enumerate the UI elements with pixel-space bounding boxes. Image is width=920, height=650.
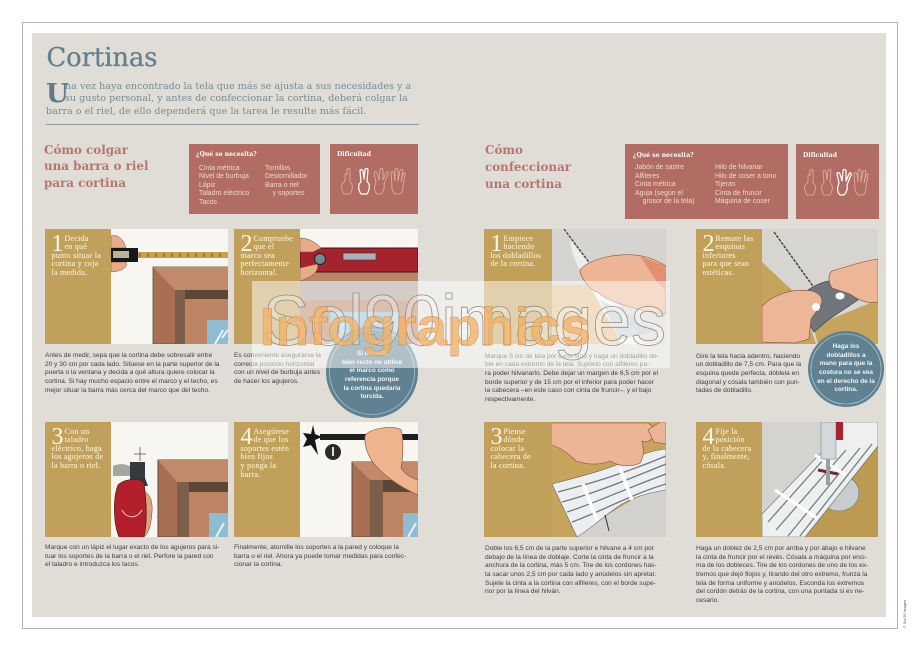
text: step 4: cionar la cortina. (234, 561, 282, 568)
callout: marco torcido: el marco como (349, 367, 395, 374)
watermark band (252, 281, 670, 368)
text: step 4: cesario. (696, 597, 719, 604)
intro paragraph: su gusto personal, y antes de confeccionar la cortina, deberá colgar la (65, 93, 408, 104)
step 2 caption: horizontal. (240, 268, 278, 277)
step 4 caption: 4 (240, 424, 252, 450)
text: step 4 (234, 544, 406, 568)
text: step 3: ta sacar unos 2,5 cm por cada lado y anúdelos sin apretar. (485, 571, 656, 578)
text: step 2: Es conveniente asegurarse la (234, 352, 321, 359)
step 3 caption: los agujeros de (52, 452, 103, 461)
panel: que se necesita right: Hilo de coser a tono (715, 172, 776, 180)
callout: dobladillos a mano: cortina. (834, 386, 858, 393)
step 3 caption: Piense (504, 426, 526, 436)
callout: dobladillos a mano: dobladillos a (826, 352, 866, 359)
step 1 caption: 1 (490, 230, 502, 256)
step 1 caption: Empiece (504, 234, 533, 242)
text: step 1 (485, 352, 659, 403)
panel: que se necesita right: Aguja (según el (635, 190, 683, 196)
text: step 1: Antes de medir, sepa que la cortina debe sobresalir entre (45, 352, 212, 359)
text: step 4: barra o el riel. Ahora ya puede tomar medidas para confec- (234, 553, 406, 560)
panel: confeccionar step 2 (696, 229, 878, 344)
watermark text: Infographics (260, 298, 591, 357)
intro paragraph: barra o el riel, de ello dependerá que la tarea le resulte más fácil. (46, 106, 366, 117)
step 2 caption: 2 (240, 230, 252, 256)
panel: colgar step 4 (234, 422, 418, 537)
panel: que se necesita left: Nivel de burbuja (199, 173, 249, 180)
panel: dificultad right: Dificultad (803, 152, 837, 159)
text: step 2 (234, 352, 321, 385)
callout: marco torcido: la cortina quedaría (344, 385, 400, 392)
step 1 caption: haciendo (504, 242, 534, 251)
step 4 caption: cósala. (702, 461, 726, 470)
step 4 caption: bien fijos (240, 452, 273, 461)
step 4 caption: 4 (702, 424, 714, 450)
step 2 caption: perfectamente (240, 259, 289, 268)
step 1 caption: de la cortina. (490, 259, 536, 268)
callout: dobladillos a mano: costura no se vea (819, 369, 873, 376)
panel: que se necesita right: ¿Qué se necesita? (633, 152, 694, 159)
step 2 caption: estéticas. (702, 268, 734, 277)
copyright credit: © Sol 90 Images (903, 600, 907, 628)
step 1 caption (45, 229, 111, 344)
callout: marco torcido: torcida. (360, 393, 384, 400)
step 1 caption: 1 (52, 230, 64, 256)
step 2 caption: que el (254, 242, 274, 251)
callout: dobladillos a mano: mano para que la (820, 360, 872, 367)
text: step 4: Finalmente, atornille los soportes a la pared y coloque la (234, 544, 399, 551)
text: step 3 (485, 545, 657, 595)
text: step 3: Doble los 6,5 cm de la parte superior e hilvane a 4 cm por (485, 545, 654, 552)
callout: marco torcido: Si no está (357, 350, 387, 357)
step 2 caption: 2 (702, 230, 714, 256)
panel: confeccionar step 3 (484, 422, 666, 537)
step 4 caption (234, 422, 300, 537)
panel: colgar step 2 (234, 229, 418, 344)
step 3 caption: cabecera de (490, 452, 531, 461)
text: step 4 (696, 545, 868, 604)
step 3 caption: Con un (64, 426, 89, 436)
step 1 caption: en qué (64, 242, 87, 251)
text: step 3: rior por la línea del hilván. (485, 588, 561, 595)
step 3 caption: taladro (64, 435, 88, 444)
text: step 1: ra poder hilvanarlo. Debe dejar un margen de 6,5 cm por el (485, 370, 658, 377)
step 1 caption: los dobladillos (490, 251, 541, 260)
panel: colgar step 1 (45, 229, 228, 344)
callout: dobladillos a mano (808, 331, 884, 407)
step 4 caption: de la cabecera (702, 444, 751, 453)
watermark text: Sol90images (263, 282, 666, 361)
panel: que se necesita right: Jabón de sastre (635, 164, 684, 171)
text: step 2: Gire la tela hacia adentro, haciendo (696, 352, 800, 360)
text: step 1 (45, 352, 220, 394)
text: step 4: ma de los dobleces. Tire de los cordones de uno de los ex- (696, 562, 868, 569)
step 1 caption: cortina y coja (52, 259, 99, 268)
step 3 caption (484, 422, 552, 537)
panel: que se necesita left: ¿Qué se necesita? (196, 151, 257, 158)
panel: que se necesita right: Tijeras (715, 181, 735, 188)
panel: dificultad left: Dificultad (337, 151, 371, 158)
step 4 caption: y, finalmente, (702, 452, 750, 461)
panel: confeccionar step 4 (696, 422, 878, 537)
step 2 caption: Compruebe (254, 234, 293, 242)
heading: como confeccionar: una cortina (485, 177, 562, 191)
text: step 1: 20 y 30 cm por cada lado. Sitúese en la parte superior de la (45, 361, 219, 368)
panel: que se necesita right: Máquina de coser (715, 198, 770, 205)
text: step 4: tremos que dejó flojos y, tirando del otro extremo, frunza la (696, 571, 867, 578)
step 2 caption (234, 229, 300, 344)
title: Cortinas (46, 43, 157, 73)
panel: que se necesita right: Alfileres (635, 172, 660, 180)
text: step 1: la cabecera –en este caso con cinta de fruncir–, y el bajo (485, 387, 651, 394)
text: step 3: Sujete la cinta a la cortina con alfileres, con el borde supe- (485, 580, 656, 587)
step 1 caption: la medida. (52, 268, 87, 277)
panel: que se necesita left: Cinta métrica (199, 164, 240, 172)
step 2 caption (696, 229, 762, 344)
text: step 1: puerta o la ventana y decida a qué altura quiere colocar la (45, 369, 215, 376)
heading: como colgar: Cómo colgar (44, 143, 128, 157)
text: step 3 (45, 544, 220, 568)
panel: colgar step 3 (45, 422, 228, 537)
text: step 4: Haga un doblez de 2,5 cm por arriba y por abajo e hilvane (696, 545, 866, 552)
step 4 caption: soportes estén (240, 444, 289, 453)
panel: que se necesita right: Cinta métrica (635, 181, 676, 188)
panel: que se necesita left: Tacos (199, 198, 217, 206)
icon: difficulty hands, level 2 (341, 168, 406, 195)
callout: dobladillos a mano: Haga los (833, 343, 859, 350)
text: step 3: el taladro e introduzca los tacos. (45, 561, 140, 568)
text: step 1: mejor situar la barra más cerca del marco que del techo. (45, 387, 210, 394)
heading: como colgar (44, 143, 148, 190)
step 1 caption (484, 229, 552, 344)
panel: que se necesita right (625, 144, 788, 219)
step 4 caption: posición (716, 435, 745, 444)
step 3 caption (45, 422, 111, 537)
heading: como confeccionar: Cómo (485, 143, 523, 157)
panel: que se necesita right: grosor de la tela) (643, 198, 694, 205)
icon: difficulty hands, level 3 (804, 168, 869, 196)
step 3 caption: dónde (504, 435, 524, 444)
step 3 caption: la barra o riel. (52, 461, 100, 470)
panel: que se necesita right: Cinta de fruncir (715, 190, 762, 196)
step 4 caption: Asegúrese (254, 426, 289, 436)
text: step 4: del cordón detrás de la cortina, con una puntada si es ne- (696, 588, 864, 595)
panel: que se necesita left: y soportes (273, 190, 304, 197)
callout: dobladillos a mano: en el derecho de la (817, 378, 875, 385)
heading: como confeccionar: confeccionar (485, 160, 571, 174)
text: step 1: respectivamente. (485, 396, 535, 403)
panel: que se necesita left: Barra o riel (265, 182, 299, 188)
heading: como colgar: una barra o riel (44, 159, 148, 173)
step 3 caption: eléctrico, haga (52, 444, 102, 453)
panel: que se necesita right: Hilo de hilvanar (715, 164, 762, 171)
step 4 caption: y ponga la (240, 461, 276, 470)
heading: como colgar: para cortina (44, 176, 126, 190)
step 4 caption: Fije la (716, 426, 737, 436)
text: step 2: de hacer los agujeros. (234, 378, 299, 385)
text: step 1: ble en cada extremo de la tela. Sujételo con alfileres pa- (485, 361, 649, 368)
text: step 2: esquina quede perfecta, dóblela en (696, 370, 799, 377)
text: step 1: cortina. Si hay mucho espacio entre el marco y el techo, es (45, 378, 218, 385)
step 2 caption: inferiores (702, 251, 736, 260)
intro paragraph (46, 78, 411, 117)
text: step 3: tuar los soportes de la barra o el riel. Perfore la pared con (45, 553, 214, 560)
step 2 caption: marco sea (240, 251, 275, 260)
text: step 3: anchura de la cortina, más 5 cm. Tire de los cordones has- (485, 562, 657, 569)
step 1 caption: Decida (64, 234, 89, 242)
callout: marco torcido: referencia porque (345, 376, 399, 383)
text: step 1: Marque 5 cm de tela por cada lado y haga un dobladillo do- (485, 352, 659, 360)
text: step 3: Marque con un lápiz el lugar exacto de los agujeros para si- (45, 544, 219, 551)
panel: que se necesita left: Tornillos (265, 164, 290, 172)
panel: dificultad left (330, 144, 418, 214)
text: step 1: borde superior y de 15 cm por el inferior para poder hacer (485, 379, 654, 386)
text: step 3: debajo de la línea de doblaje. Corte la cinta de fruncir a la (485, 554, 654, 561)
step 4 caption: barra. (240, 470, 260, 479)
heading: como confeccionar (485, 143, 572, 191)
callout: marco torcido: bien recto no utilice (342, 359, 402, 366)
panel: que se necesita left: Destornillador (265, 173, 308, 180)
step 3 caption: colocar la (490, 444, 524, 453)
panel: que se necesita left: Lápiz (199, 182, 215, 188)
text: step 2: diagonal y cósala también con pun- (696, 379, 800, 386)
intro paragraph: U (46, 78, 69, 108)
step 1 caption: punto situar la (52, 251, 101, 260)
text: step 4: la cinta de fruncir por el revés. Cósala a máquina por enci- (696, 554, 867, 561)
step 4 caption: de que los (254, 435, 288, 444)
text: step 2: con un nivel de burbuja antes (234, 369, 320, 376)
step 2 caption: esquinas (716, 242, 745, 251)
text: step 2 (696, 352, 802, 394)
step 3 caption: 3 (52, 424, 64, 450)
step 4 caption (696, 422, 762, 537)
text: step 4: tela de forma uniforme y anúdelos. Esconda los extremos (696, 580, 864, 587)
text: step 2: un dobladillo de 7,5 cm. Para que la (696, 361, 801, 368)
panel: que se necesita left: Taladro eléctrico (199, 190, 249, 197)
callout: marco torcido (326, 326, 418, 418)
step 3 caption: la cortina. (490, 461, 525, 470)
text: step 2: correcta posición horizontal (234, 361, 314, 368)
step 3 caption: 3 (490, 424, 502, 450)
panel: confeccionar step 1 (484, 229, 666, 344)
panel: que se necesita left (189, 144, 320, 214)
step 2 caption: Remate las (716, 234, 753, 242)
step 2 caption: para que sean (702, 259, 749, 268)
intro paragraph: na vez haya encontrado la tela que más se ajusta a sus necesidades y a (65, 80, 411, 92)
panel: dificultad right (796, 144, 879, 219)
text: step 2: tadas de dobladillo. (696, 387, 753, 394)
